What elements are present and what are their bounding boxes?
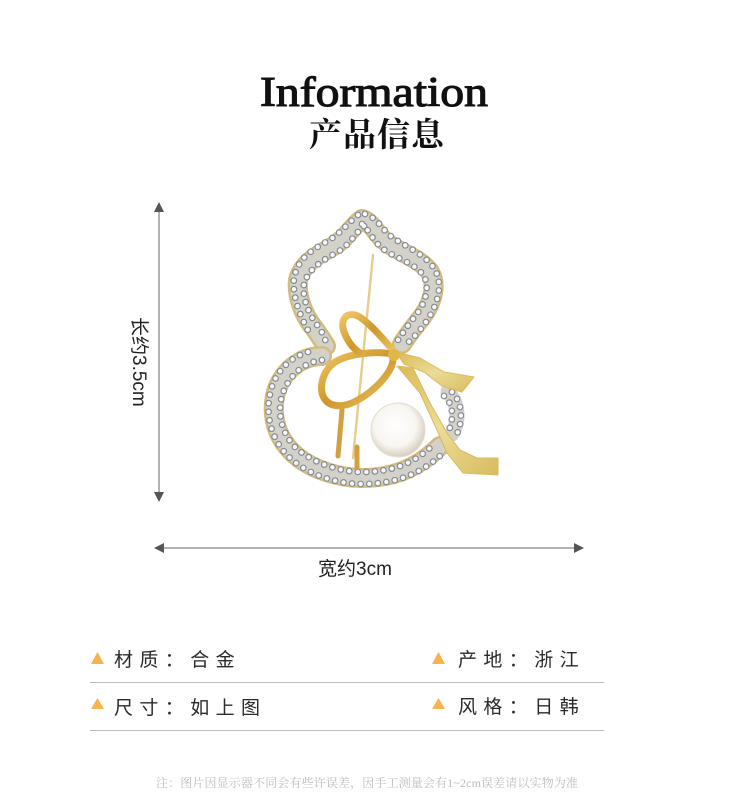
title: Information: Information <box>260 70 488 116</box>
arrow: vertical dimension <box>154 202 164 502</box>
pearl <box>371 403 425 457</box>
brooch pin <box>353 255 373 458</box>
divider <box>90 682 604 684</box>
label: width: 宽约3cm <box>318 558 392 580</box>
spec row: material: 材质：合金 <box>114 649 241 671</box>
arrow: horizontal dimension <box>154 543 584 553</box>
spec row: size: 尺寸：如上图 <box>114 697 266 719</box>
spec row: origin: 产地：浙江 <box>458 649 585 671</box>
gold bow <box>322 315 400 406</box>
footnote: 注：图片因显示器不同会有些许误差，因手工测量会有1~2cm误差请以实物为准 <box>156 775 578 790</box>
divider <box>90 730 604 732</box>
spec row: style: 风格：日韩 <box>458 696 585 718</box>
pin clasp <box>338 410 357 467</box>
gold ribbon tails <box>396 352 474 392</box>
upper stones <box>294 214 439 344</box>
label: length: 长约3.5cm <box>128 317 150 407</box>
subtitle: 产品信息: 产品信息 <box>309 117 446 154</box>
gourd lower band <box>268 352 461 484</box>
product photo: gourd brooch <box>268 214 498 484</box>
lower stones <box>268 352 461 484</box>
gourd upper band <box>294 214 439 346</box>
